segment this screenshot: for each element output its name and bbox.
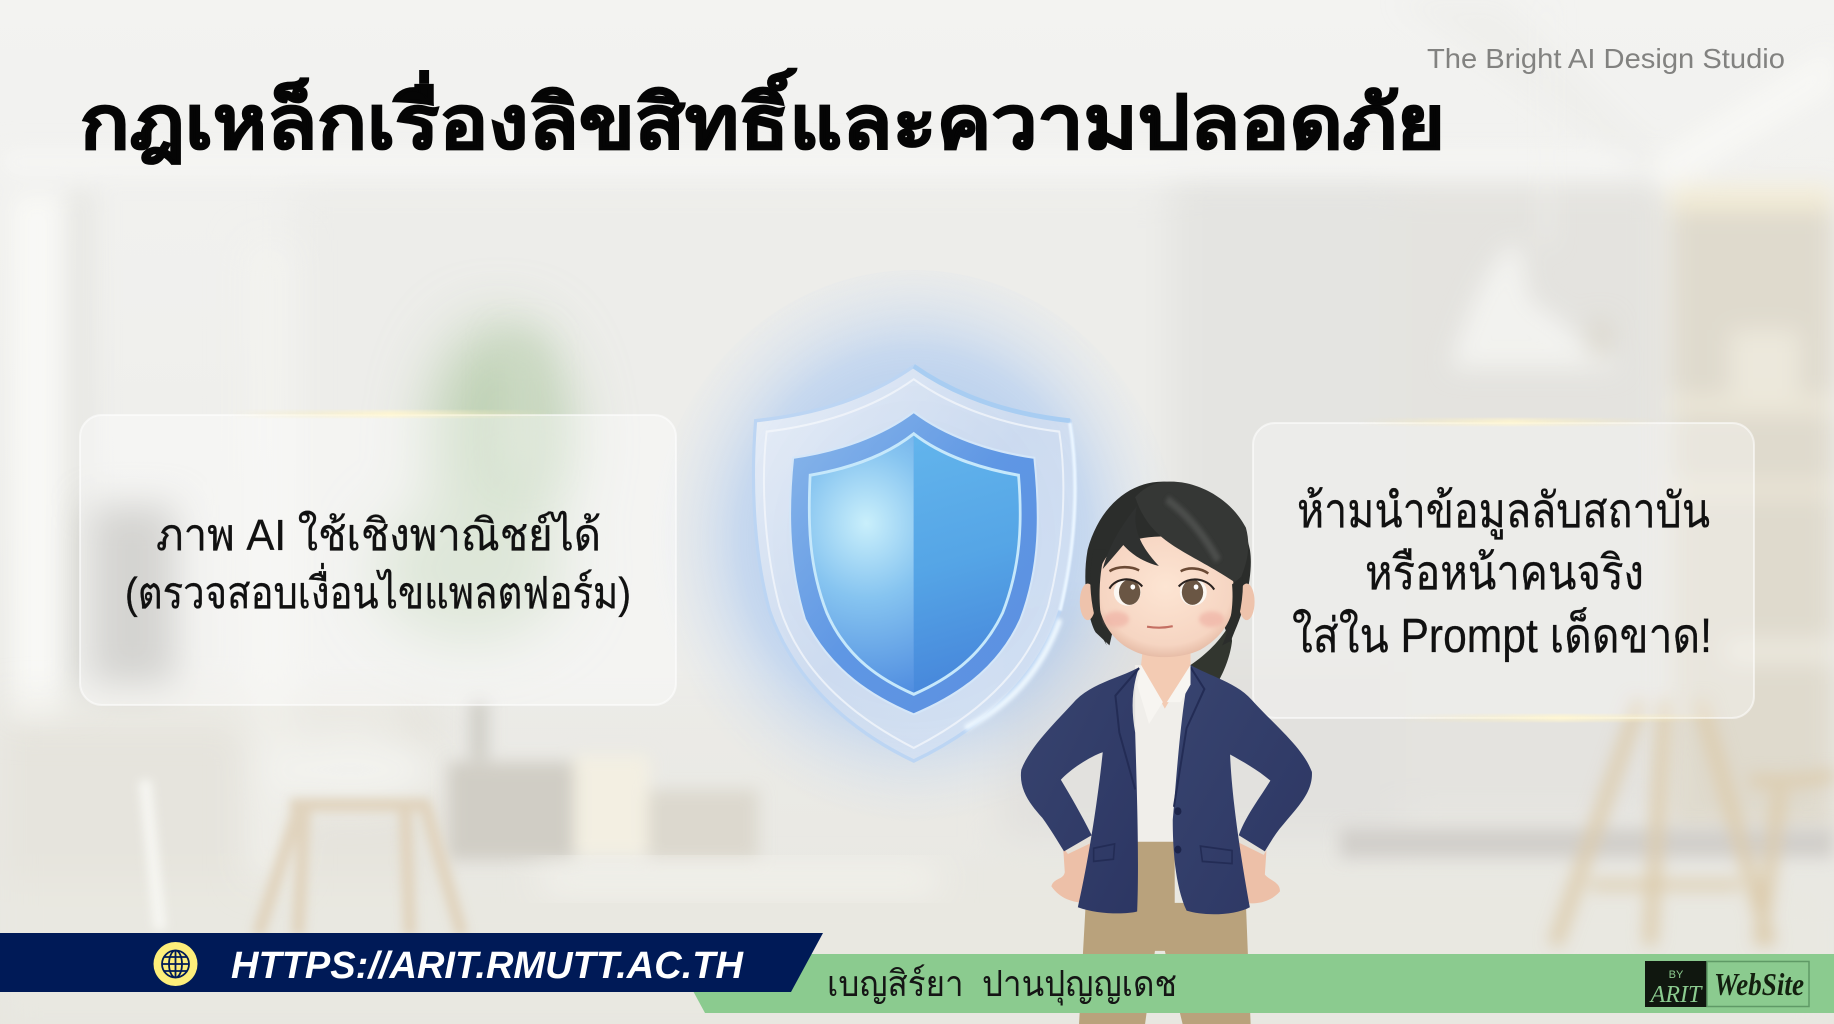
text: prohibition line 2: หรือหน้าคนจริง — [1365, 547, 1644, 600]
text: prohibition line 1: ห้ามนำข้อมูลลับสถาบัน — [1297, 485, 1710, 540]
trousers — [1079, 903, 1251, 1024]
text: commercial use line 1: ภาพ AI ใช้เชิงพาณิชย์ได้ — [156, 510, 601, 560]
character: woman in navy blazer — [1021, 482, 1312, 1024]
background: plant — [375, 325, 570, 640]
lapels and pockets — [1115, 668, 1139, 789]
ponytail — [1191, 624, 1232, 685]
collar — [1137, 665, 1163, 724]
panel: commercial use card — [80, 411, 676, 705]
panel: prohibition card — [1253, 419, 1754, 721]
text: prohibition line 3: ใส่ใน Prompt เด็ดขาด! — [1292, 607, 1712, 663]
icon: glass shield — [753, 366, 1075, 761]
card top highlight — [1360, 419, 1660, 425]
waistband — [1135, 842, 1175, 907]
title: กฎเหล็กเรื่องลิขสิทธิ์และความปลอดภัย — [80, 68, 1445, 164]
text: WebSite: WebSite — [1714, 966, 1804, 1002]
cheeks — [1104, 611, 1129, 627]
footer: green name bar — [673, 954, 1834, 1013]
bangs — [1103, 506, 1159, 569]
text: website URL: HTTPS://ARIT.RMUTT.AC.TH — [231, 945, 745, 987]
icon: globe — [154, 942, 198, 986]
blazer — [1021, 667, 1139, 913]
ears — [1080, 583, 1096, 620]
logo: ARIT website badge — [1645, 961, 1809, 1008]
text: BY: BY — [1669, 969, 1684, 981]
eyebrows — [1109, 567, 1139, 571]
shirt — [1135, 665, 1191, 846]
text: ARIT: ARIT — [1649, 982, 1703, 1008]
shield glow — [649, 270, 1179, 840]
cuffs — [1062, 833, 1094, 854]
text: commercial use line 2: (ตรวจสอบเงื่อนไขแพลตฟอร์ม) — [125, 562, 631, 618]
text: author name: เบญสิร์ยา ปานปุญญเดช — [827, 963, 1177, 1006]
background: chair legs left — [145, 780, 462, 935]
background: lamp — [1450, 0, 1617, 370]
footer: navy URL bar — [0, 933, 823, 992]
neck — [1141, 645, 1191, 709]
hands — [1051, 837, 1096, 903]
face — [1097, 536, 1234, 657]
card top highlight — [230, 411, 550, 417]
card bottom highlight — [1400, 715, 1720, 721]
studio watermark: The Bright AI Design Studio — [1427, 43, 1785, 74]
back hair — [1085, 482, 1251, 645]
mouth — [1147, 626, 1173, 628]
background: baseboard and stool right — [1340, 700, 1834, 945]
eyes — [1114, 579, 1141, 606]
